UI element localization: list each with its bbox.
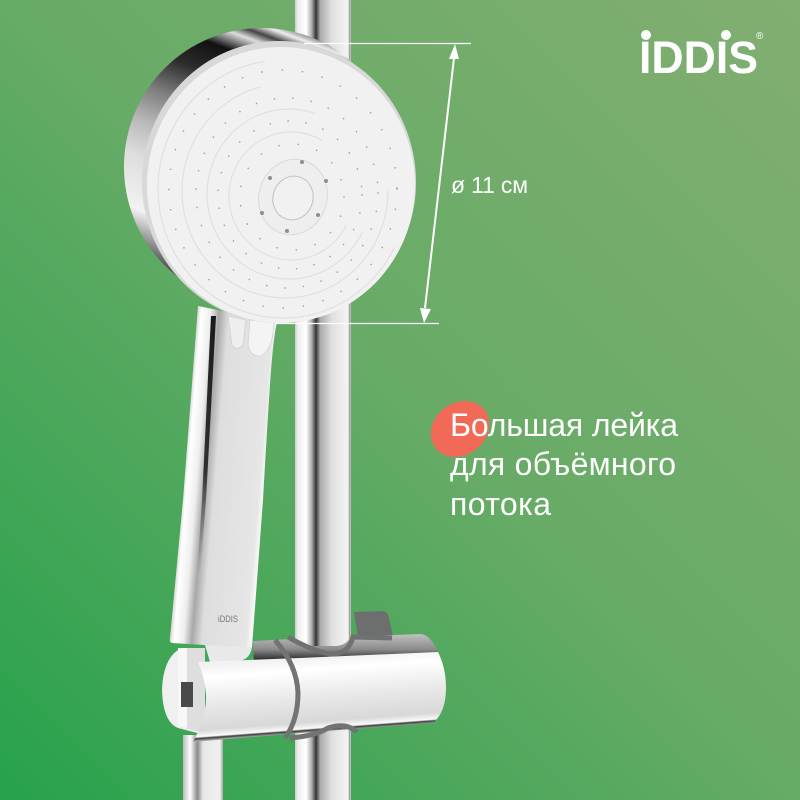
face rim	[142, 41, 416, 323]
bracket top	[253, 634, 438, 664]
dimension lines	[276, 44, 471, 324]
dimension label: ø 11 см	[451, 172, 528, 198]
main caption: Большая лейка	[450, 407, 678, 443]
shower handle	[170, 306, 277, 648]
coral accent circle	[420, 389, 500, 469]
shower rail	[295, 0, 351, 800]
white face	[147, 47, 415, 323]
rail clip and knob	[354, 611, 393, 638]
shower head	[106, 10, 418, 324]
grey band bottom	[290, 726, 357, 738]
grey band vertical	[275, 640, 298, 738]
chrome back shell	[106, 10, 418, 324]
swivel dark band	[181, 682, 193, 707]
centre nozzle ring	[249, 150, 337, 244]
swivel cap	[162, 650, 205, 735]
main caption: для объёмного	[450, 446, 676, 482]
brand logo: IDDIS	[639, 32, 758, 83]
main caption: потока	[450, 486, 551, 522]
grey band top	[288, 637, 392, 654]
nozzle dots	[169, 70, 397, 308]
brand logo: ®	[756, 31, 764, 42]
handle dark reflection	[197, 316, 216, 575]
rail in front of bracket top	[295, 620, 351, 646]
logo on handle: iDDIS	[218, 614, 238, 625]
handle neck details	[228, 316, 246, 348]
handle joint	[205, 645, 252, 662]
wall bracket	[162, 620, 446, 742]
bracket body	[193, 652, 446, 742]
shower hose	[183, 735, 223, 800]
main caption	[450, 407, 678, 522]
dimension arrow heads	[420, 44, 459, 323]
concentric relief rings	[158, 60, 408, 318]
swivel chrome piece	[178, 648, 205, 734]
